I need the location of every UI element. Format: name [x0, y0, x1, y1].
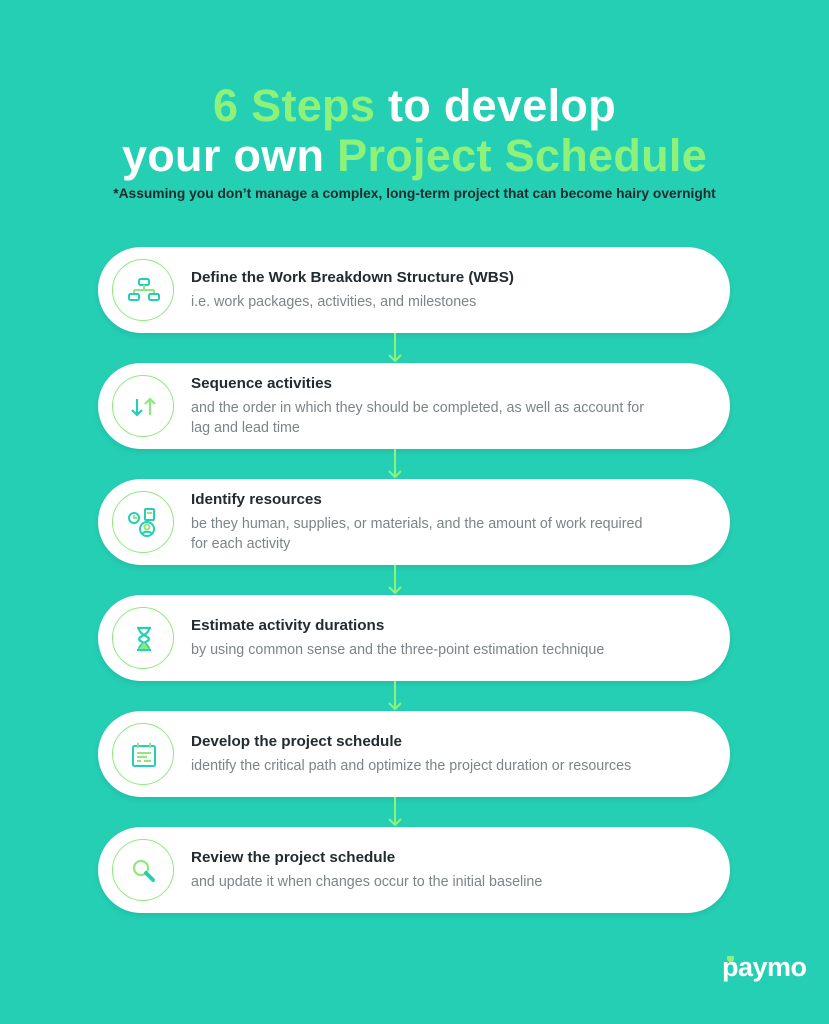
card 1: Define the Work Breakdown Structure (WBS)	[191, 269, 514, 286]
card 2	[98, 363, 730, 449]
card 3: be they human, supplies, or materials, and the amount of work required	[191, 516, 642, 532]
title	[122, 80, 707, 181]
arrow	[388, 333, 402, 362]
card 5: identify the critical path and optimize the project duration or resources	[191, 758, 631, 774]
card 2: Sequence activities	[191, 375, 332, 392]
card 5: Develop the project schedule	[191, 733, 402, 750]
card 1	[98, 247, 730, 333]
card 6: Review the project schedule	[191, 849, 395, 866]
logo: paymo: paymo	[722, 952, 807, 982]
text: your own Project Schedule	[122, 130, 707, 181]
icon: hierarchy	[112, 259, 174, 321]
card 3: for each activity	[191, 536, 290, 552]
card 6	[98, 827, 730, 913]
arrow	[388, 797, 402, 826]
icon: resources	[112, 491, 174, 553]
card 1: i.e. work packages, activities, and milestones	[191, 294, 476, 310]
icon: hourglass	[112, 607, 174, 669]
card 4: by using common sense and the three-point estimation technique	[191, 642, 604, 658]
card 2: lag and lead time	[191, 420, 300, 436]
arrow	[388, 565, 402, 594]
card 4	[98, 595, 730, 681]
card 3	[98, 479, 730, 565]
icon: magnifier	[112, 839, 174, 901]
card 6: and update it when changes occur to the initial baseline	[191, 874, 542, 890]
arrow	[388, 449, 402, 478]
icon: calendar	[112, 723, 174, 785]
card 5	[98, 711, 730, 797]
subtitle: *Assuming you don’t manage a complex, long-term project that can become hairy overnight	[113, 186, 716, 201]
icon: arrows	[112, 375, 174, 437]
card 3: Identify resources	[191, 491, 322, 508]
text: 6 Steps to develop	[213, 80, 616, 131]
card 2: and the order in which they should be completed, as well as account for	[191, 400, 644, 416]
card 4: Estimate activity durations	[191, 617, 384, 634]
arrow	[388, 681, 402, 710]
